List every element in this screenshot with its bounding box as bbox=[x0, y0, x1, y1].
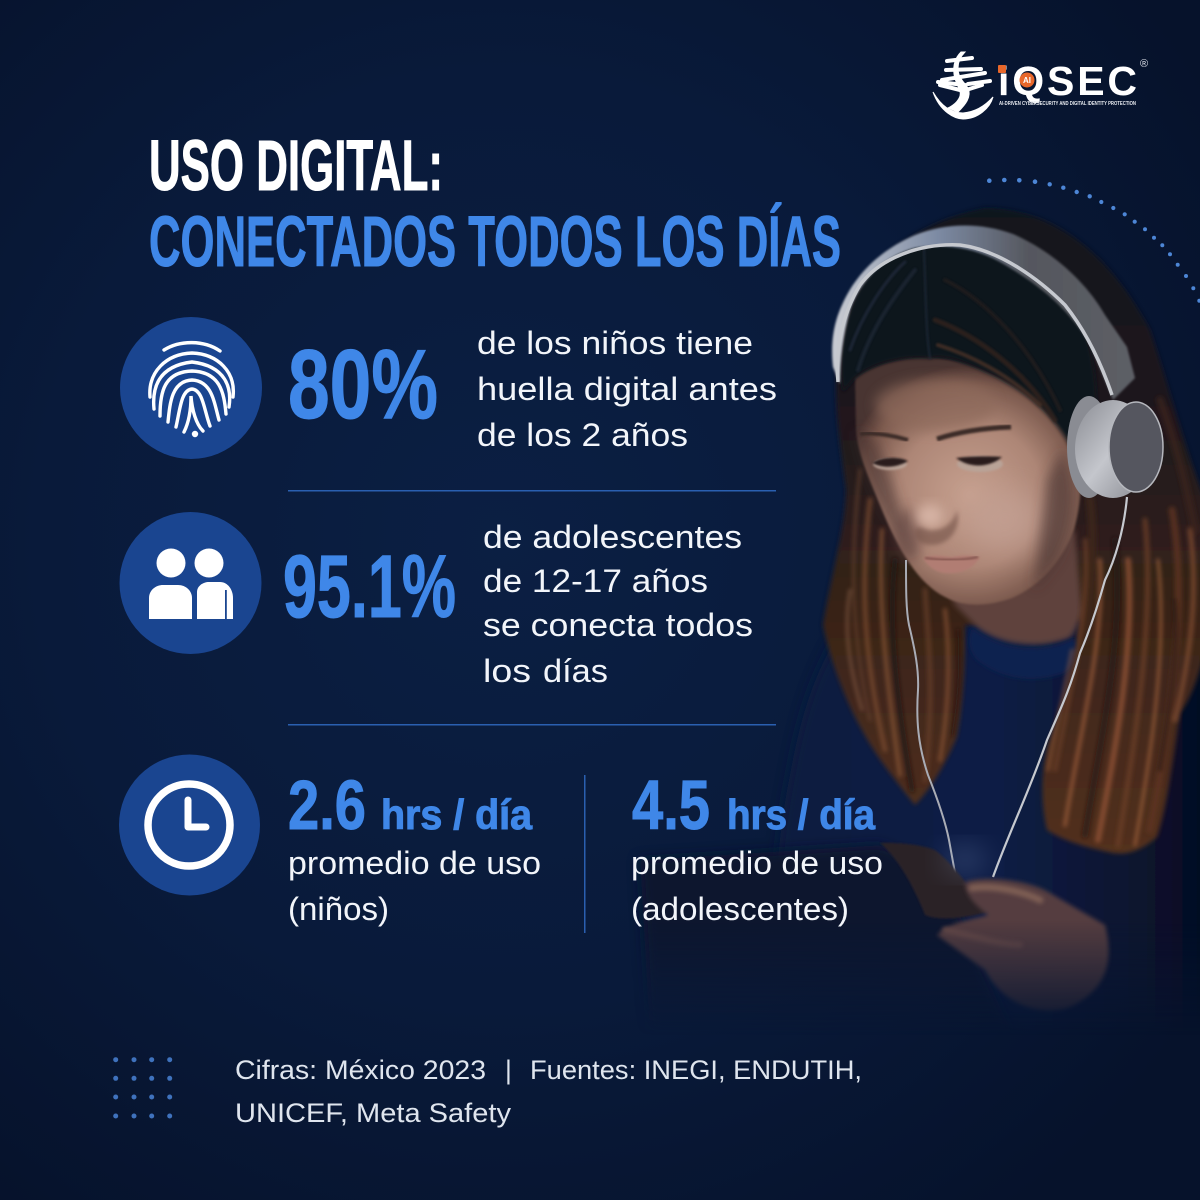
description: días bbox=[543, 653, 608, 689]
row: daily connection bbox=[120, 512, 753, 689]
hair highlights bbox=[850, 250, 1060, 420]
description: children bbox=[288, 845, 541, 927]
finger highlights bbox=[945, 887, 1040, 945]
eyebrows bbox=[860, 433, 908, 440]
left cable bbox=[906, 560, 955, 873]
description: children: promedio de uso bbox=[288, 845, 541, 881]
description: los bbox=[483, 653, 531, 689]
ear cup bbox=[1075, 400, 1131, 498]
row: digital footprint bbox=[120, 317, 777, 459]
stat: 95.1%: 95.1% bbox=[283, 536, 456, 636]
brown hair strands bbox=[847, 400, 1195, 845]
description: de 12-17 años bbox=[483, 563, 708, 599]
divider bbox=[288, 724, 776, 726]
tablet bbox=[640, 843, 987, 994]
sweater bbox=[852, 626, 1200, 950]
ear pad bbox=[1067, 396, 1100, 498]
face bbox=[855, 358, 1080, 605]
title bbox=[149, 127, 841, 282]
description: children: (niños) bbox=[288, 891, 389, 927]
logo wordmark: iQSEC bbox=[998, 58, 1137, 104]
stat: 80%: 80% bbox=[288, 329, 438, 439]
decorative dotted arc bbox=[987, 178, 1200, 303]
logo i dot bbox=[998, 65, 1006, 73]
ear cup plate bbox=[1109, 402, 1163, 492]
description: teens: promedio de uso bbox=[631, 845, 883, 881]
logo registered mark: ® bbox=[1140, 58, 1148, 70]
logo AI badge bbox=[1020, 72, 1034, 88]
footer source note: Cifras: México 2023 bbox=[235, 1055, 486, 1085]
hair back bbox=[823, 208, 1200, 854]
phone bbox=[880, 843, 988, 918]
headband inner strip bbox=[837, 245, 1112, 395]
row: hours of use bbox=[119, 754, 883, 933]
headphones bbox=[832, 225, 1163, 498]
description: huella digital antes bbox=[477, 371, 777, 407]
icon: clock bbox=[119, 754, 260, 896]
eyes bbox=[873, 458, 907, 470]
description bbox=[477, 325, 777, 453]
description: se conecta todos bbox=[483, 607, 753, 643]
footer source note: Fuentes: INEGI, ENDUTIH, bbox=[530, 1055, 862, 1085]
divider bbox=[288, 490, 776, 492]
illustration: girl with headphones using a phone bbox=[640, 208, 1200, 1060]
hand bbox=[937, 879, 1109, 1011]
logo bbox=[933, 52, 1148, 119]
icon: people bbox=[120, 512, 262, 654]
description: de los niños tiene bbox=[477, 325, 753, 361]
sweater collar bbox=[969, 628, 1076, 679]
footer source note bbox=[235, 1055, 862, 1128]
logo tree bbox=[933, 52, 993, 119]
right cable bbox=[993, 497, 1127, 877]
hair front bbox=[841, 235, 1097, 450]
title line 1: USO DIGITAL: bbox=[149, 127, 443, 206]
neck bbox=[945, 530, 1082, 645]
stat: teen hours: hrs / día bbox=[727, 791, 876, 838]
stat: children hours: 2.6 bbox=[288, 766, 366, 844]
vertical separator bbox=[584, 775, 586, 933]
description: de los 2 años bbox=[477, 417, 688, 453]
logo AI badge: AI bbox=[1023, 76, 1031, 85]
footer source note: | bbox=[505, 1055, 512, 1085]
phone screen glow bbox=[943, 846, 987, 874]
footer source note: UNICEF, Meta Safety bbox=[235, 1098, 512, 1128]
description: de adolescentes bbox=[483, 519, 742, 555]
description: teens: (adolescentes) bbox=[631, 891, 849, 927]
stat: teen hours: 4.5 bbox=[632, 766, 710, 844]
facial shading bbox=[856, 379, 1073, 590]
logo tagline: AI-DRIVEN CYBERSECURITY AND DIGITAL IDENTITY PROTECTION bbox=[999, 101, 1136, 107]
stat: children hours: hrs / día bbox=[381, 791, 533, 838]
headband bbox=[832, 225, 1135, 400]
description: teens bbox=[631, 845, 883, 927]
decorative dot grid bbox=[113, 1057, 172, 1118]
nose bbox=[915, 510, 958, 545]
lips bbox=[923, 555, 980, 573]
stat: children hours bbox=[288, 766, 533, 844]
description bbox=[483, 519, 753, 689]
icon: fingerprint bbox=[120, 317, 262, 459]
stat: teen hours bbox=[632, 766, 876, 844]
